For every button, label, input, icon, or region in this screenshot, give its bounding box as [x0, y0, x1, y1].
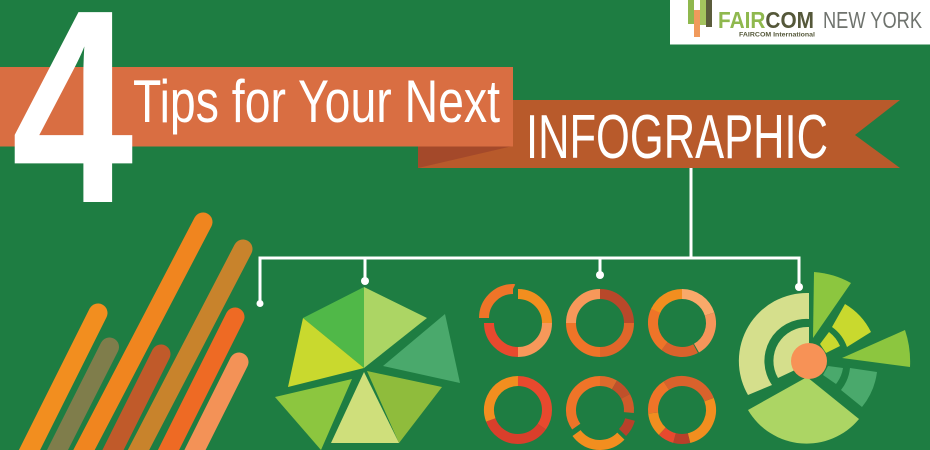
chart: donut 3 — [641, 282, 723, 364]
heading: Tips for Your Next: Tips for Your Next — [133, 68, 500, 135]
chart: diagonal bars — [19, 213, 253, 450]
logo wordmark: FAIRCOM — [718, 7, 814, 33]
sunburst hub — [791, 343, 827, 379]
chart: donut 4 — [478, 370, 558, 450]
ribbon: tips — [0, 67, 513, 146]
chart: donut 1 — [484, 289, 547, 352]
chart: donut 6 — [641, 369, 723, 450]
ribbon: infographic — [418, 100, 900, 172]
chart: donut 5 — [559, 370, 641, 450]
icon: logo bars — [688, 0, 712, 37]
logo subtitle: FAIRCOM International — [739, 32, 815, 38]
connector lines — [256, 168, 803, 307]
chart: exploded sunburst — [739, 272, 910, 444]
chart: exploded heptagon — [275, 287, 460, 450]
panel: logo — [670, 0, 930, 44]
chart: donut 2 — [571, 294, 629, 352]
